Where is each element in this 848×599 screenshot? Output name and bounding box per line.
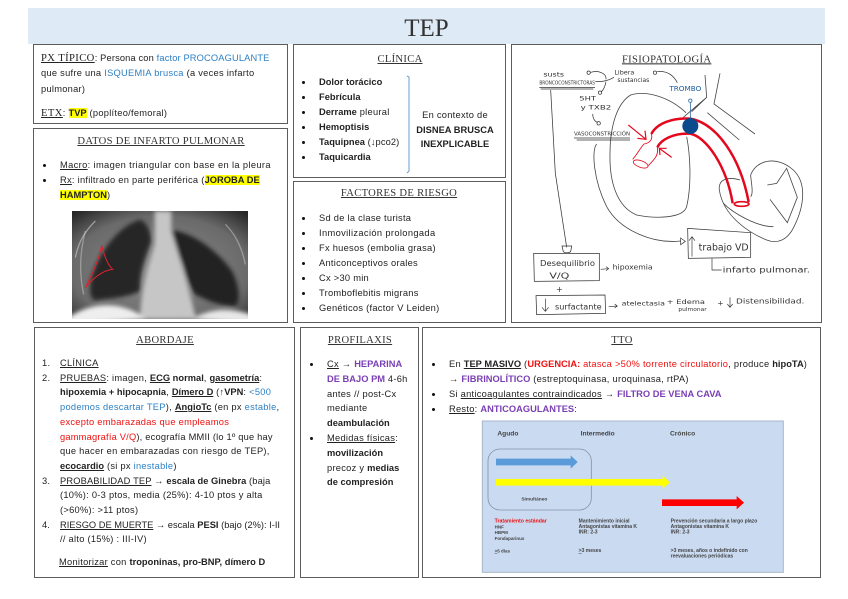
pathophysiology diagram: [533, 53, 810, 315]
list of prophylaxis measures: Cx → HEPARINA: [327, 359, 402, 369]
simultaneous group: Simultáneo: [521, 496, 547, 502]
box: trabajo VD: infarto pulmonar.: [722, 265, 810, 274]
column: chronic treatment: Antagonistas vitamina K: [670, 524, 729, 530]
column: intermediate treatment: >3 meses: [578, 548, 601, 554]
anticoagulation timeline chart: [482, 420, 784, 573]
numbered list of diagnostic approach: // alto (15%) : III-IV): [60, 534, 147, 544]
column: intermediate treatment: INR: 2-3: [578, 529, 597, 535]
heading: FACTORES DE RIESGO: [341, 188, 457, 199]
column: chronic treatment: reevaluaciones periódicas: [670, 553, 733, 559]
context note: En contexto de: [422, 110, 488, 120]
column: chronic treatment: [670, 518, 757, 559]
panel: abordaje: 2.: [42, 373, 50, 383]
panel: presentación típica y etiología: [33, 44, 288, 124]
list of treatments: [432, 359, 807, 414]
embolus (thrombus) in blue: [668, 84, 701, 134]
list of treatments: Si anticoagulantes contraindicados → FILTRO DE VENA CAVA: [449, 389, 722, 399]
list of risk factors: Fx huesos (embolia grasa): [319, 243, 436, 253]
lung and bronchi outline: [594, 73, 755, 241]
list of treatments: → FIBRINOLÍTICO (estreptoquinasa, uroquinasa, rtPA): [449, 374, 689, 384]
phase headers: Crónico: [670, 430, 695, 437]
box: surfactante and consequences: atelectasia: [621, 300, 665, 307]
list of risk factors: Sd de la clase turista: [319, 213, 411, 223]
column: acute treatment: Fondaparinux: [494, 536, 525, 541]
heading: PROFILAXIS: [328, 335, 392, 346]
panel: fisiopatología: [511, 44, 822, 323]
handwritten notes on mediators: BRONCOCONSTRICTORAS: [539, 80, 595, 86]
list of symptoms: Taquipnea (↓pco2): [319, 137, 399, 147]
list of prophylaxis measures: mediante: [327, 403, 367, 413]
list of prophylaxis measures: deambulación: [327, 418, 390, 428]
list of symptoms: Dolor torácico: [319, 77, 382, 87]
box: desequilibrio V/Q: V/Q: [549, 271, 569, 280]
text block: paciente típico: PX TÍPICO: Persona con factor PROCOAGULANTE: [41, 53, 270, 64]
arrow: blue: [496, 455, 577, 468]
box: trabajo VD: trabajo VD: [698, 242, 748, 253]
text block: macro y rx: HAMPTON): [60, 190, 110, 200]
heading: FISIOPATOLOGÍA: [622, 53, 711, 65]
panel: abordaje: 3.: [42, 476, 50, 486]
context note: INEXPLICABLE: [421, 139, 489, 149]
handwritten notes on mediators: sustancias: [617, 77, 649, 84]
numbered list of diagnostic approach: hipoxemia + hipocapnia, Dímero D (↑VPN: <500: [60, 387, 271, 397]
list of prophylaxis measures: movilización: [327, 448, 383, 458]
title banner: [28, 8, 825, 44]
column: chronic treatment: Prevención secundaria a largo plazo: [670, 518, 757, 524]
box: surfactante and consequences: + Edema: [666, 299, 705, 306]
numbered list of diagnostic approach: PRUEBAS: imagen, ECG normal, gasometría:: [60, 373, 262, 383]
list of risk factors: Cx >30 min: [319, 273, 369, 283]
panel: tratamiento: [422, 327, 821, 578]
box: trabajo VD: [680, 228, 810, 274]
arrow: red: [662, 496, 744, 509]
handwritten notes on mediators: y TXB2: [580, 104, 611, 111]
panel: abordaje: 4.: [42, 520, 50, 530]
numbered list of diagnostic approach: ecocardio (si px inestable): [60, 461, 177, 471]
box: surfactante and consequences: +: [717, 298, 723, 307]
box: surfactante and consequences: pulmonar: [678, 307, 707, 313]
heart outline: [719, 161, 802, 241]
numbered list of diagnostic approach: excepto embarazadas que empleamos: [60, 417, 229, 427]
arrow: yellow: [496, 475, 670, 488]
box: surfactante and consequences: surfactante: [555, 302, 602, 311]
text block: paciente típico: que sufre una ISQUEMIA brusca (a veces infarto: [41, 68, 254, 78]
context note: DISNEA BRUSCA: [416, 125, 494, 135]
numbered list of diagnostic approach: podemos descartar TEP), AngioTc (en px estable,: [60, 402, 279, 412]
box: desequilibrio V/Q: +: [556, 285, 562, 294]
numbered list of diagnostic approach: gammagrafía V/Q), ecografía MMII (lo 1º que hay: [60, 432, 273, 442]
bracket: [406, 76, 410, 174]
phase headers: Intermedio: [580, 430, 614, 437]
list of prophylaxis measures: de compresión: [327, 477, 393, 487]
handwritten notes on mediators: susts: [543, 71, 564, 78]
column: acute treatment: Tratamiento estándar: [494, 518, 546, 524]
handwritten notes on mediators: [539, 69, 677, 253]
text block: etiología: ETX: TVP (poplíteo/femoral): [41, 108, 167, 119]
box: desequilibrio V/Q: [533, 253, 652, 294]
box: desequilibrio V/Q: Desequilibrio: [540, 258, 595, 268]
box: surfactante and consequences: [536, 295, 804, 314]
handwritten notes on mediators: 5HT: [579, 95, 596, 102]
list of symptoms: Febrícula: [319, 92, 361, 102]
list of treatments: Resto: ANTICOAGULANTES:: [449, 404, 577, 414]
list of symptoms: Taquicardia: [319, 152, 371, 162]
panel: profilaxis: [300, 327, 419, 578]
list of treatments: En TEP MASIVO (URGENCIA: atasca >50% torrente circulatorio, produce hipoTA): [449, 359, 807, 369]
column: intermediate treatment: Antagonistas vitamina K: [578, 524, 637, 530]
list of risk factors: Tromboflebitis migrans: [319, 288, 419, 298]
handwritten notes on mediators: VASOCONSTRICCIÓN: [574, 130, 630, 137]
column: acute treatment: [494, 518, 546, 553]
pulmonary artery in red: [628, 118, 749, 206]
list of prophylaxis measures: antes // post-Cx: [327, 389, 396, 399]
simultaneous group: [488, 449, 591, 510]
heading: ABORDAJE: [136, 335, 194, 346]
list of symptoms: [302, 77, 399, 162]
numbered list of diagnostic approach: [42, 358, 280, 544]
numbered list of diagnostic approach: que hacer en embarazadas con riesgo de TEP),: [60, 446, 270, 456]
list of risk factors: Genéticos (factor V Leiden): [319, 303, 439, 313]
handwritten notes on mediators: Libera: [614, 69, 634, 76]
list of prophylaxis measures: DE BAJO PM 4-6h: [327, 374, 408, 384]
chest x-ray image with red triangle: [72, 211, 248, 319]
list of prophylaxis measures: [310, 359, 408, 487]
box: surfactante and consequences: Distensibilidad.: [736, 297, 804, 305]
list of risk factors: Anticonceptivos orales: [319, 258, 418, 268]
column: intermediate treatment: Mantenimiento inicial: [578, 518, 630, 524]
column: chronic treatment: INR: 2-3: [670, 529, 689, 535]
column: intermediate treatment: [578, 518, 637, 554]
text block: macro y rx: Macro: imagen triangular con base en la pleura: [60, 160, 271, 170]
title banner: TEP: [404, 15, 449, 42]
column: chronic treatment: >3 meses, años o indefinido con: [670, 548, 747, 554]
heading: TTO: [611, 335, 633, 346]
column: acute treatment: >5 días: [494, 548, 510, 553]
context note: [416, 110, 494, 149]
box: desequilibrio V/Q: hipoxemia: [612, 263, 652, 271]
text block: macro y rx: [43, 160, 271, 200]
list of prophylaxis measures: precoz y medias: [327, 463, 399, 473]
phase headers: Agudo: [497, 430, 518, 437]
list of risk factors: [302, 213, 439, 313]
text block: macro y rx: Rx: infiltrado en parte periférica (JOROBA DE: [60, 175, 260, 185]
text block: paciente típico: pulmonar): [41, 84, 85, 94]
panel: abordaje: [34, 327, 295, 578]
column: acute treatment: HBPM: [494, 530, 508, 535]
list of prophylaxis measures: Medidas físicas:: [327, 433, 398, 443]
monitoring note: Monitorizar con troponinas, pro-BNP, dímero D: [59, 557, 265, 567]
panel: datos de infarto pulmonar: [33, 128, 288, 323]
list of symptoms: Hemoptisis: [319, 122, 369, 132]
text block: paciente típico: [41, 52, 270, 94]
panel: clínica: [293, 44, 506, 178]
panel: factores de riesgo: [293, 181, 506, 323]
numbered list of diagnostic approach: (>60%): >11 ptos): [60, 505, 138, 515]
numbered list of diagnostic approach: RIESGO DE MUERTE → escala PESI (bajo (2%): I-II: [60, 520, 280, 530]
phase headers: [497, 430, 695, 437]
list of symptoms: Derrame pleural: [319, 107, 390, 117]
panel: abordaje: 1.: [42, 358, 50, 368]
numbered list of diagnostic approach: CLÍNICA: [60, 358, 99, 368]
embolus (thrombus) in blue: TROMBO: [668, 84, 701, 93]
heading: DATOS DE INFARTO PULMONAR: [77, 136, 245, 147]
numbered list of diagnostic approach: PROBABILIDAD TEP → escala de Ginebra (baja: [60, 476, 270, 486]
column: acute treatment: HNF: [494, 524, 504, 529]
heading: CLÍNICA: [377, 54, 423, 65]
numbered list of diagnostic approach: (10%): 0-3 ptos, media (25%): 4-10 ptos y alta: [60, 490, 263, 500]
list of risk factors: Inmovilización prolongada: [319, 228, 436, 238]
